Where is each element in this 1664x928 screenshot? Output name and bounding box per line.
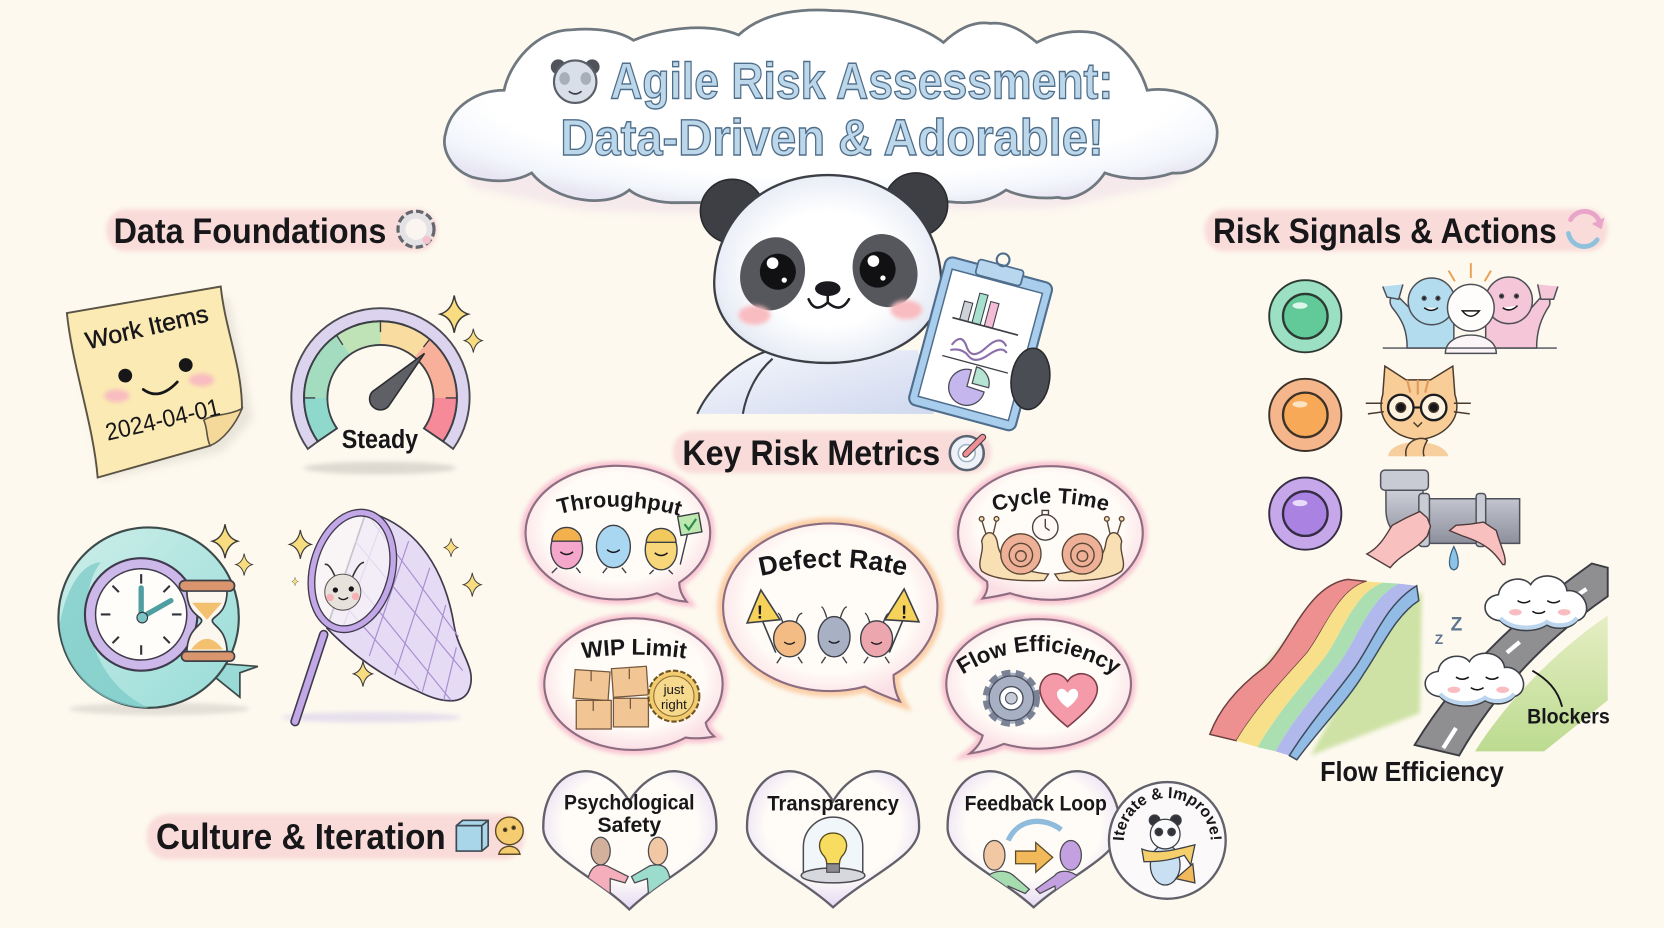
- heading band: [1204, 209, 1608, 251]
- panel: risk signals and actions: [1204, 209, 1610, 787]
- bug net: [281, 503, 481, 723]
- heading: Data Foundations: [114, 212, 386, 251]
- sparkles: [290, 530, 481, 687]
- bubble: defect rate: Defect Rate: [758, 550, 906, 576]
- gear: [986, 673, 1037, 724]
- sleep marks: [1435, 614, 1463, 647]
- exchange figures: [983, 840, 1082, 894]
- icon: little person: [496, 817, 523, 854]
- panda eyes: [760, 251, 896, 290]
- bubble: defect rate: !: [901, 603, 907, 623]
- panel: key risk metrics: [518, 430, 1150, 762]
- heading band: [106, 209, 437, 251]
- heart: psychological safety: [543, 771, 716, 909]
- label: [745, 567, 921, 580]
- road: [1415, 563, 1608, 756]
- ribbon loop: [58, 527, 239, 708]
- badge: iterate and improve: Iterate & Improve!: [1112, 787, 1222, 840]
- orange arrow: [1016, 843, 1053, 872]
- signal: purple: [1269, 478, 1341, 550]
- signal: green: [1269, 280, 1341, 352]
- heading band: [146, 814, 524, 860]
- stopwatch: [1033, 510, 1058, 540]
- heart: psychological safety: Safety: [597, 814, 661, 837]
- label: [982, 503, 1120, 516]
- net handle: [295, 635, 324, 722]
- bubble: defect rate: !: [757, 603, 763, 623]
- gauge label: Steady: [342, 426, 419, 454]
- icon: glass cube: [456, 820, 488, 851]
- cat with glasses: [1366, 366, 1471, 456]
- title text: [560, 53, 1113, 166]
- clock hands: [141, 588, 171, 618]
- icon: gear face: [398, 211, 434, 247]
- net hoop: [299, 503, 406, 638]
- bubble: defect rate: [715, 515, 946, 713]
- boxes: [573, 666, 648, 729]
- curved label: [1124, 798, 1211, 851]
- label: [953, 651, 1125, 681]
- badge: iterate and improve: [1108, 780, 1227, 900]
- bubble: cycle time: [952, 460, 1150, 606]
- flow efficiency caption: Flow Efficiency: [1320, 756, 1504, 787]
- water drop: [1449, 547, 1458, 570]
- bubble: flow efficiency: [940, 612, 1138, 762]
- sparkles: [440, 295, 482, 353]
- heading: Risk Signals & Actions: [1213, 212, 1557, 251]
- handshake people: [587, 837, 671, 894]
- panda mascot: [697, 173, 1058, 432]
- heading: Culture & Iteration: [156, 816, 446, 857]
- sleep marks: Z: [1435, 632, 1444, 647]
- road with sleeping clouds: [1415, 563, 1610, 756]
- panda eye patches: [730, 225, 928, 320]
- sleeping cloud bottom: [1425, 653, 1524, 706]
- note label: Work Items: [83, 301, 211, 355]
- sparkles: [212, 524, 252, 576]
- clock face: [85, 558, 197, 671]
- label: Psychological: [564, 792, 695, 815]
- panel: culture and iteration: [145, 770, 1227, 911]
- hands: [1367, 511, 1431, 568]
- seal: just right: just: [663, 682, 685, 697]
- clock with ribbon: [58, 524, 258, 715]
- panel: data foundations: [58, 209, 482, 723]
- heart: feedback loop: [948, 771, 1120, 907]
- panda body: [697, 350, 934, 414]
- title cloud: [444, 10, 1217, 213]
- rainbow slide: [1210, 579, 1422, 760]
- bubble: throughput: [518, 459, 717, 609]
- label: Transparency: [767, 793, 899, 816]
- blue return arrow: [1008, 821, 1061, 840]
- bubble: wip limit: [538, 612, 730, 757]
- clipboard line chart: [950, 329, 1009, 367]
- signal: orange: [1269, 379, 1341, 451]
- heart: transparency: [747, 771, 919, 907]
- paper curl: [204, 409, 242, 446]
- clipboard: [907, 239, 1058, 432]
- snails: [979, 517, 1124, 581]
- gauge needle: [370, 353, 425, 410]
- bulb in glass dome: [801, 817, 865, 883]
- sticky note: work items: [67, 287, 253, 480]
- bubble: flow efficiency: Flow Efficiency: [956, 634, 1121, 675]
- panda head: [714, 175, 941, 363]
- bugs: [774, 607, 892, 663]
- gauge: steady: [291, 295, 482, 474]
- workers: [551, 513, 702, 574]
- bubble: throughput: Throughput: [556, 492, 682, 516]
- warning signs: [747, 589, 919, 653]
- bug: [325, 562, 364, 610]
- icon: small panda face: [551, 59, 600, 103]
- heart: [1040, 674, 1097, 727]
- grass: [1218, 592, 1422, 756]
- heading: Key Risk Metrics: [682, 434, 940, 473]
- sleep marks: Z: [1451, 614, 1463, 635]
- label: Feedback Loop: [965, 793, 1107, 816]
- team celebrating: [1383, 263, 1558, 353]
- leaking pipe: [1367, 470, 1520, 570]
- label: [547, 507, 692, 520]
- panda hand: [1007, 346, 1054, 412]
- gauge rim: [291, 308, 470, 449]
- clipboard pie chart: [945, 361, 993, 410]
- blockers label: Blockers: [1527, 706, 1610, 729]
- label: [573, 655, 695, 660]
- sleeping cloud top: [1485, 576, 1587, 631]
- panda with ribbon: [1142, 815, 1195, 885]
- panda nose and mouth: [809, 281, 849, 308]
- bubble: wip limit: WIP Limit: [580, 638, 687, 658]
- title text: Data-Driven & Adorable!: [560, 109, 1104, 166]
- seal: just right: [648, 671, 699, 722]
- icon: target: [950, 436, 984, 470]
- panda ears: [700, 173, 948, 243]
- hourglass: [179, 580, 235, 661]
- bubble: cycle time: Cycle Time: [992, 488, 1108, 512]
- net mesh: [327, 511, 471, 701]
- gauge segments: [304, 322, 457, 441]
- ribbon tail: [203, 662, 258, 697]
- panda cheeks: [739, 300, 922, 325]
- title text: Agile Risk Assessment:: [610, 53, 1113, 110]
- note face: [104, 358, 214, 402]
- slide stripes: [1210, 579, 1419, 760]
- blockers pointer: [1532, 671, 1562, 707]
- icon: cycle arrows: [1568, 211, 1605, 247]
- clipboard bar chart: [952, 288, 1026, 335]
- seal: just right: right: [661, 697, 687, 712]
- heading band: [673, 431, 991, 473]
- note date: 2024-04-01: [103, 394, 223, 447]
